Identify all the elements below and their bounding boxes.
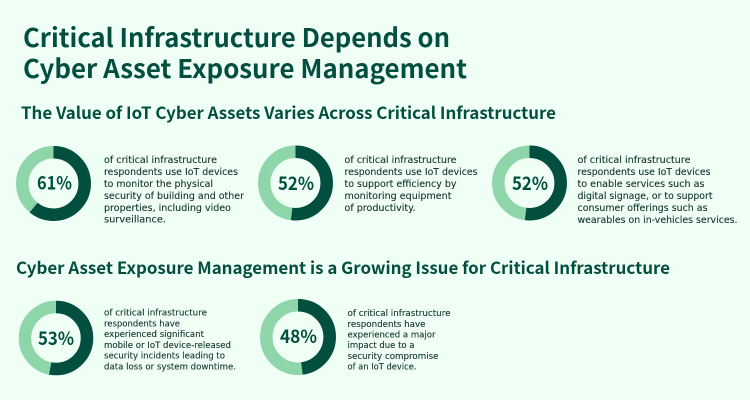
text: 52% services description: consumer offerings such as xyxy=(578,203,708,214)
text: 61% description: respondents use IoT devices xyxy=(104,167,238,178)
text: 53% description: security incidents leading to xyxy=(104,350,225,362)
text: 53% description: mobile or IoT device-released xyxy=(104,340,231,351)
title xyxy=(23,18,467,86)
text: 52% efficiency description xyxy=(344,155,478,214)
text: 61% description: properties, including video xyxy=(104,203,231,214)
donut chart: 52% services xyxy=(498,152,561,214)
text: 61% description: surveillance. xyxy=(104,214,166,226)
title: Critical Infrastructure Depends on xyxy=(23,18,450,55)
text: 61% description: security of building and other xyxy=(104,191,244,202)
stat: 61% monitoring xyxy=(22,152,244,226)
text: 48% description: of critical infrastructure xyxy=(348,308,451,319)
text: 48% description: respondents have xyxy=(348,319,426,330)
text: 52% efficiency description: to support efficiency by xyxy=(344,179,457,190)
text: 53% description xyxy=(104,308,236,372)
donut chart: 52% efficiency: 52% xyxy=(278,170,314,196)
donut chart: 53%: 53% xyxy=(38,325,74,351)
title: Cyber Asset Exposure Management xyxy=(23,49,467,86)
donut chart: 52% efficiency xyxy=(264,152,327,214)
text: 48% description: impact due to a xyxy=(348,340,414,351)
text: 53% description: of critical infrastructure xyxy=(104,308,207,318)
donut chart: 61% xyxy=(22,152,85,215)
stat: 53% incidents xyxy=(25,307,236,372)
text: 48% description xyxy=(348,308,451,372)
text: 52% efficiency description: monitoring equipment xyxy=(344,191,452,202)
text: 61% description: to monitor the physical xyxy=(104,179,213,190)
text: 48% description: of an IoT device. xyxy=(348,362,416,372)
text: 52% services description: to enable services such as xyxy=(578,179,704,190)
text: 52% efficiency description: of productivity. xyxy=(344,203,416,214)
donut chart: 48%: 48% xyxy=(280,323,317,349)
stat: 52% efficiency xyxy=(264,152,478,214)
stat: 48% impact xyxy=(266,305,451,372)
text: 52% efficiency description: respondents use IoT devices xyxy=(344,167,478,178)
donut chart: 53% xyxy=(25,307,87,369)
heading: growing issue: Cyber Asset Exposure Management is a Growing Issue for Critical Infrastructure xyxy=(16,255,670,279)
stat: 52% services xyxy=(498,152,738,226)
text: 53% description: data loss or system downtime. xyxy=(104,362,236,372)
text: 52% services description: wearables on in-vehicles services. xyxy=(578,215,738,226)
text: 61% description: of critical infrastructure xyxy=(104,155,217,166)
text: 52% services description: respondents use IoT devices xyxy=(578,167,710,178)
heading: value of IoT cyber assets: The Value of IoT Cyber Assets Varies Across Critical Infrastructure xyxy=(21,100,556,124)
donut chart: 61%: 61% xyxy=(37,170,72,196)
donut chart: 52% services: 52% xyxy=(512,170,548,196)
text: 61% description xyxy=(104,155,244,226)
text: 48% description: security compromise xyxy=(348,351,439,362)
text: 53% description: respondents have xyxy=(104,318,180,330)
text: 52% services description xyxy=(578,155,738,226)
text: 48% description: experienced a major xyxy=(348,330,436,340)
text: 52% services description: digital signage, or to support xyxy=(578,191,713,202)
text: 52% efficiency description: of critical infrastructure xyxy=(344,155,457,166)
text: 53% description: experienced significant xyxy=(104,329,204,340)
text: 52% services description: of critical infrastructure xyxy=(578,155,691,166)
donut chart: 48% xyxy=(266,305,330,369)
